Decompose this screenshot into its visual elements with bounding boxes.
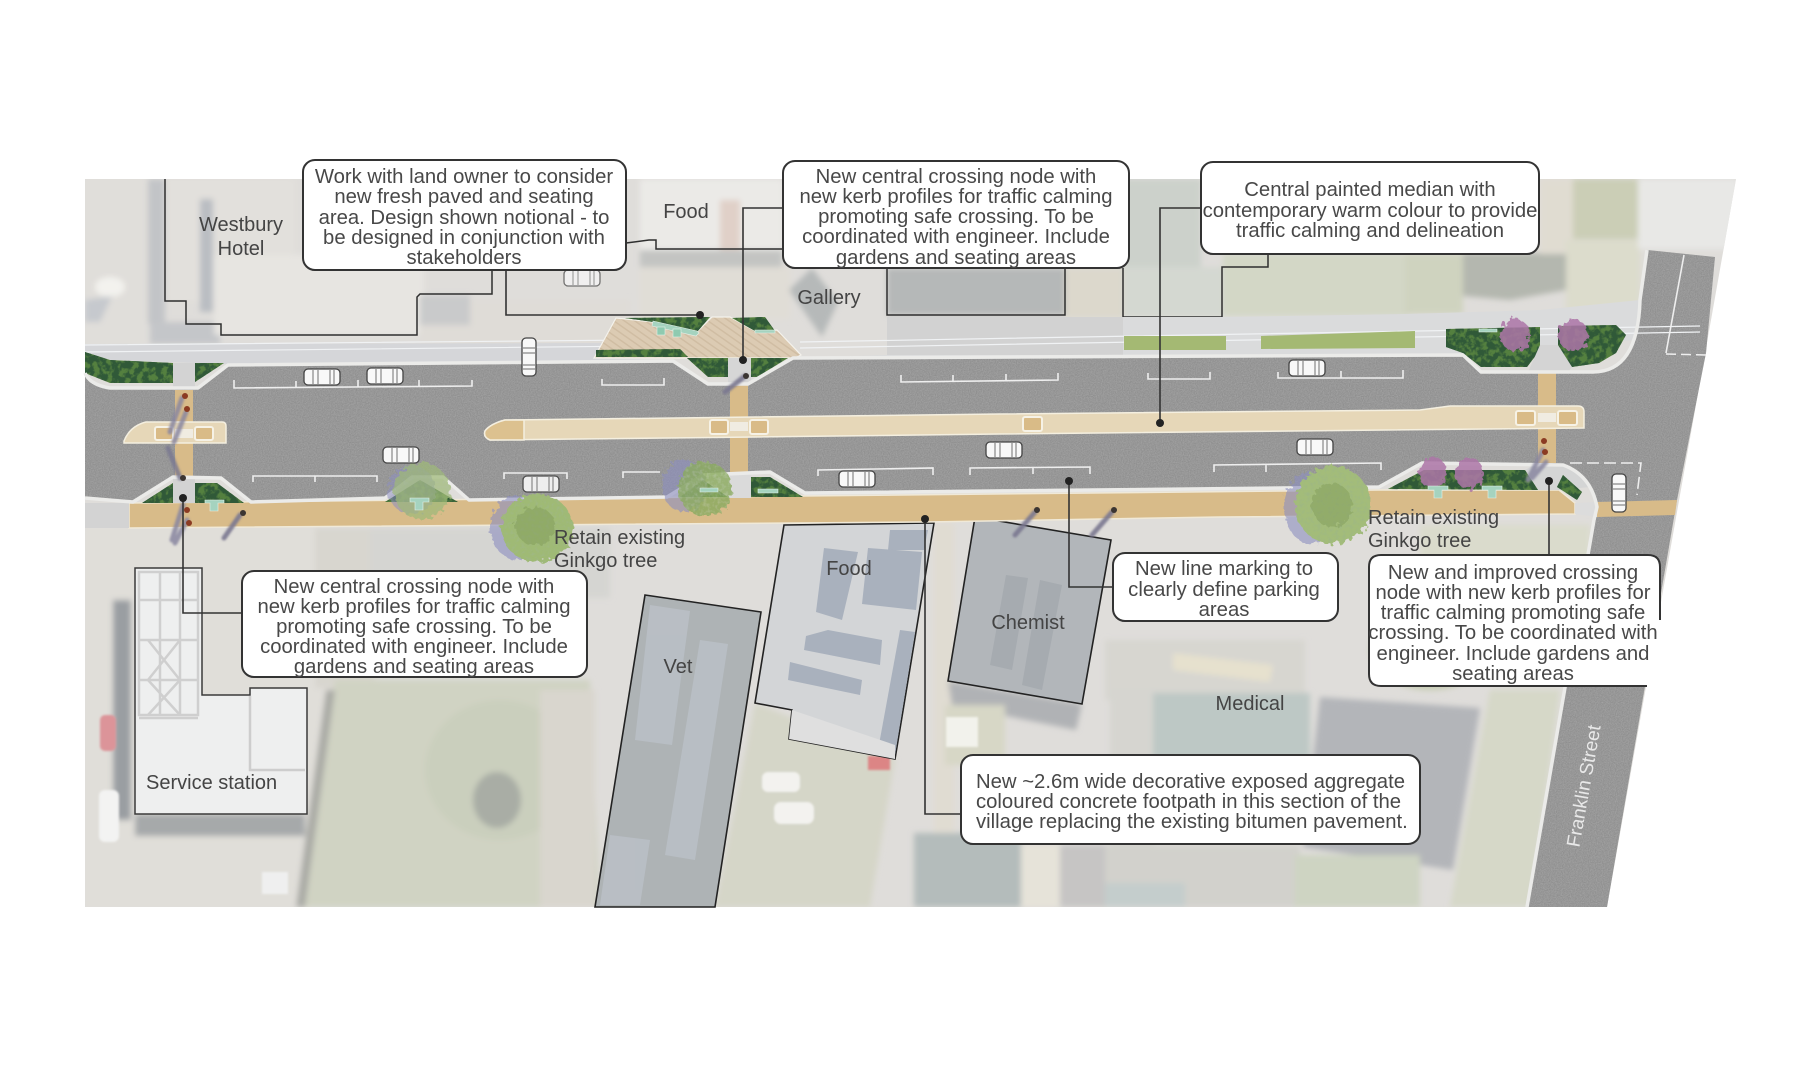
callout: improved crossing node: [1368, 555, 1660, 686]
callout: central painted median: traffic calming and delineation: [1236, 220, 1504, 242]
gardens: [85, 310, 1645, 510]
callout: central crossing node south: promoting safe crossing. To be: [276, 616, 552, 638]
leader: central crossing north: [739, 208, 783, 364]
callout: improved crossing node: New and improved crossing: [1388, 562, 1638, 584]
callout: central crossing node south: new kerb profiles for traffic calming: [258, 596, 570, 618]
pedestrians: [168, 373, 1548, 543]
leader: land owner callout: [506, 270, 704, 319]
callout: central crossing node south: coordinated with engineer. Include: [260, 636, 568, 658]
leader: improved crossing: [1545, 477, 1553, 555]
callout: line marking: areas: [1199, 599, 1249, 621]
cars: [304, 270, 1626, 512]
label: Medical: Medical: [1216, 693, 1284, 715]
kerb lines: [85, 250, 1647, 907]
label: Westbury Hotel: Westbury: [199, 214, 283, 236]
callout: central crossing node south: New central crossing node with: [274, 576, 554, 598]
callout: improved crossing node: node with new kerb profiles for: [1375, 582, 1651, 604]
road surface: [85, 250, 1715, 907]
building: Vet: [595, 595, 761, 907]
plaza: paved seating area: [594, 317, 801, 358]
callout: land owner paved area: Work with land owner to consider: [315, 166, 613, 188]
building: Food north outline: [626, 240, 783, 249]
label: Retain existing Ginkgo tree east: Retain existing: [1368, 507, 1499, 529]
building: Westbury Hotel outline: [165, 179, 492, 335]
map labels: [146, 201, 1606, 849]
callout: improved crossing node: crossing. To be coordinated with: [1368, 622, 1658, 644]
callout: decorative footpath: village replacing the existing bitumen pavement.: [976, 811, 1408, 833]
callout: central crossing node north: coordinated with engineer. Include: [802, 226, 1110, 248]
south decorative footpath: [85, 462, 1677, 528]
label: Chemist: Chemist: [991, 612, 1065, 634]
callout: central crossing node south: gardens and seating areas: [294, 656, 534, 678]
tree 2: [490, 494, 573, 562]
label: Franklin Street: Franklin Street: [1564, 723, 1606, 849]
label: Retain existing Ginkgo tree west: Ginkgo tree: [554, 550, 657, 572]
label: Vet: Vet: [664, 656, 693, 678]
label: Food north: Food: [663, 201, 709, 223]
building: north shops outlines: [887, 254, 1268, 317]
callout: improved crossing node: seating areas: [1452, 663, 1574, 685]
callout: central crossing node north: New central crossing node with: [816, 166, 1096, 188]
callout: land owner paved area: new fresh paved and seating: [334, 186, 594, 208]
leader: central crossing south: [179, 494, 242, 613]
callout: decorative footpath: [961, 755, 1420, 844]
callout: line marking: New line marking to: [1135, 558, 1313, 580]
callout: central crossing node north: [783, 161, 1129, 269]
label: Food south: Food: [826, 558, 872, 580]
aerial base map: [85, 179, 1745, 907]
callout: central painted median: Central painted median with: [1244, 179, 1496, 201]
callout: land owner paved area: area. Design shown notional - to: [319, 207, 609, 229]
benches: [205, 321, 1502, 511]
building: Chemist: [948, 517, 1111, 704]
road crossings: [175, 373, 1556, 477]
callout: line marking: clearly define parking: [1128, 579, 1320, 601]
label: Gallery: Gallery: [797, 287, 861, 309]
leader: footpath: [921, 515, 961, 814]
cars in aerial: [99, 715, 978, 894]
trees: [388, 460, 1371, 562]
callout: central painted median: contemporary warm colour to provide: [1203, 200, 1537, 222]
north footpath: [85, 300, 1700, 364]
tree 4: [1284, 466, 1371, 544]
callout: central crossing node south: [242, 571, 587, 678]
crossing pads: [173, 345, 1572, 503]
leader: line marking: [1065, 477, 1113, 587]
callout: decorative footpath: coloured concrete footpath in this section of the: [976, 791, 1401, 813]
callout: improved crossing node: traffic calming promoting safe: [1381, 602, 1645, 624]
painted central median: [124, 406, 1584, 443]
callout: central crossing node north: new kerb profiles for traffic calming: [800, 186, 1112, 208]
callout: central painted median: [1201, 162, 1539, 254]
callout: central crossing node north: gardens and seating areas: [836, 247, 1076, 269]
callout: land owner paved area: be designed in conjunction with: [323, 227, 605, 249]
building: Food south: [755, 523, 934, 759]
label: Service station: Service station: [146, 772, 277, 794]
tree 3: [662, 460, 732, 516]
leader: painted median: [1156, 208, 1201, 427]
label: Retain existing Ginkgo tree west: Retain existing: [554, 527, 685, 549]
callout: land owner paved area: stakeholders: [406, 247, 522, 269]
building: Service station: [135, 568, 307, 814]
tree 1: [388, 463, 450, 519]
flowering shrubs: [1419, 319, 1588, 489]
lawn strips: [1124, 331, 1415, 350]
label: Westbury Hotel: Hotel: [218, 238, 264, 260]
callout: central crossing node north: promoting safe crossing. To be: [818, 206, 1094, 228]
label: Retain existing Ginkgo tree east: Ginkgo tree: [1368, 530, 1471, 552]
callout: line marking: [1113, 553, 1338, 621]
callout: land owner paved area: [303, 160, 626, 270]
callout: decorative footpath: New ~2.6m wide decorative exposed aggregate: [976, 771, 1405, 793]
callout: improved crossing node: engineer. Include gardens and: [1377, 643, 1649, 665]
parking line marking: [234, 255, 1706, 495]
